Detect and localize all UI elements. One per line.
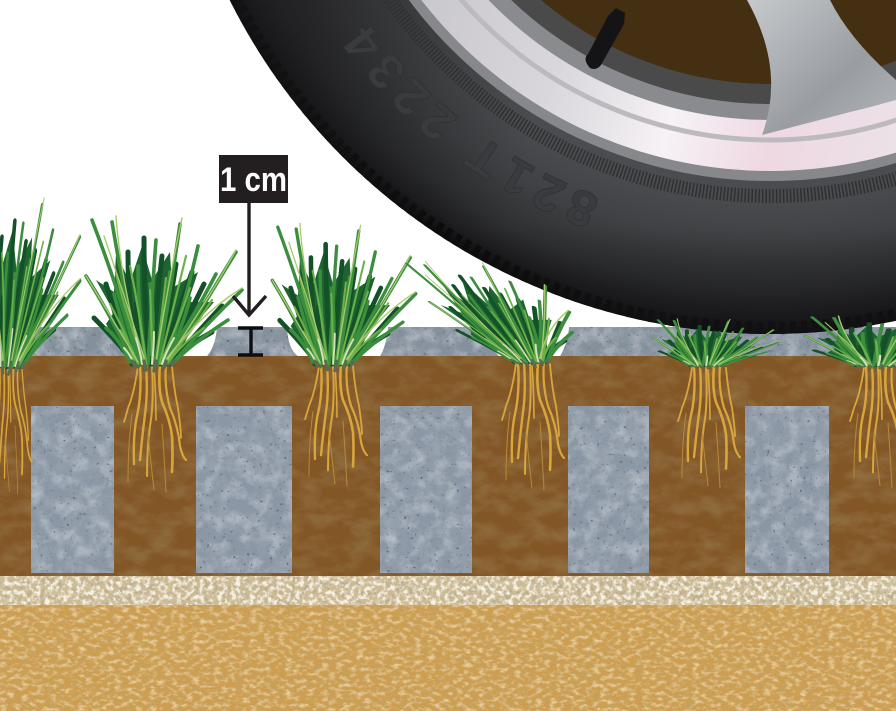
- grass plant 1: [0, 196, 88, 494]
- grass plant 4: [400, 261, 610, 490]
- sidewall lettering: 821T 2234: [344, 28, 597, 226]
- rim: [319, 0, 896, 181]
- sidewall shading: [220, 0, 896, 340]
- grass plant 2: [86, 216, 242, 492]
- spoke: [747, 0, 896, 135]
- measurement arrow: [233, 202, 266, 315]
- concrete paver bases: [31, 406, 829, 573]
- soil layer: [0, 356, 896, 576]
- gravel base layer: [0, 605, 896, 711]
- valve stem: [586, 8, 625, 69]
- concrete paver tops: [25, 327, 896, 356]
- grass plant 6 (flattened by tyre): [805, 316, 896, 488]
- tread lugs: [172, 0, 896, 328]
- grass plant 5 (flattened by tyre): [653, 319, 778, 488]
- rim well: [380, 0, 896, 120]
- grass plant 3: [272, 223, 416, 486]
- height marker: 1 cm: [238, 328, 263, 355]
- tyre ribbing: [304, 0, 896, 196]
- wheel opening: [416, 0, 896, 84]
- tyre: [166, 0, 896, 334]
- wheel: [230, 0, 896, 334]
- sand bedding strip: [0, 576, 896, 605]
- label: 1 cm: 1 cm: [220, 161, 287, 199]
